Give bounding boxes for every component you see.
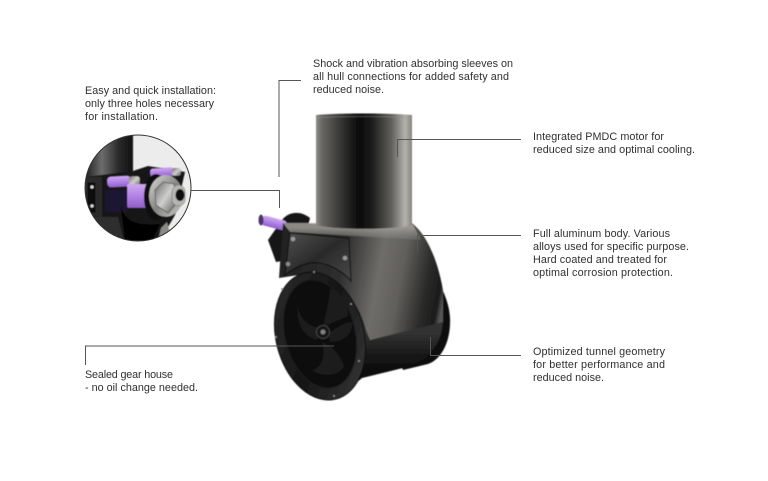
callout text: gear house: Sealed gear house (85, 369, 173, 381)
rear flange (395, 285, 450, 370)
connector lines over product (86, 140, 521, 365)
propeller blades (298, 288, 352, 375)
housing shoulder highlight (283, 223, 421, 240)
callout text: aluminum body: alloys used for specific purpose. (533, 241, 689, 253)
tunnel tube (345, 300, 443, 392)
callout text: sleeves: all hull connections for added safety and (313, 71, 509, 83)
mounting bolt with purple sleeve (258, 213, 310, 262)
purple sleeves and bolts (107, 167, 185, 220)
callout text: installation: Easy and quick installation: (85, 85, 216, 97)
product: thruster (258, 114, 450, 410)
callout text: tunnel: Optimized tunnel geometry (533, 346, 666, 358)
callout text: sleeves: reduced noise. (313, 84, 384, 96)
callout text: installation: for installation. (85, 111, 158, 123)
callout lines (191, 80, 301, 208)
gear housing body (279, 223, 443, 340)
callout text: motor: reduced size and optimal cooling. (533, 144, 695, 156)
callout text: aluminum body: Hard coated and treated for (533, 254, 667, 266)
callout text: motor: Integrated PMDC motor for (533, 131, 664, 143)
callout text: sleeves: Shock and vibration absorbing sleeves on (313, 58, 513, 70)
access plate (285, 233, 351, 281)
motor cylinder (316, 114, 412, 229)
callout text: tunnel: reduced noise. (533, 372, 604, 384)
ring screws (275, 271, 360, 397)
callout text: installation: only three holes necessary (85, 98, 215, 110)
callout text: aluminum body: optimal corrosion protection. (533, 267, 673, 279)
callout text: aluminum body: Full aluminum body. Various (533, 228, 671, 240)
tunnel front ring with propeller (262, 262, 378, 410)
detail lens: installation close-up (85, 135, 191, 241)
callout text: tunnel: for better performance and (533, 359, 665, 371)
propeller hub (316, 326, 330, 338)
callout text: gear house: - no oil change needed. (85, 382, 198, 394)
